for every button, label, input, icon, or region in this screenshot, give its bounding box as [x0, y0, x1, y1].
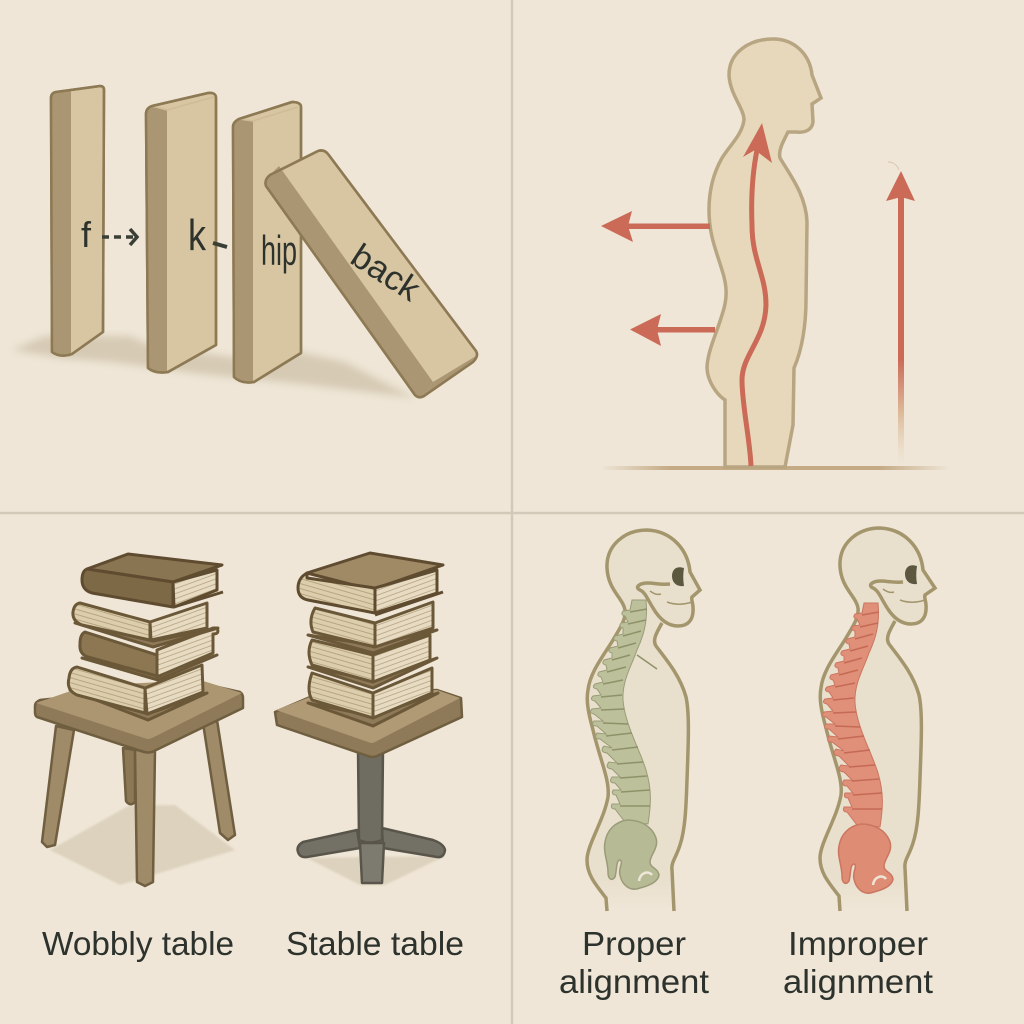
domino: hip	[233, 102, 301, 382]
domino labels: hip	[261, 227, 297, 274]
front leg	[135, 750, 155, 886]
body fill	[820, 528, 933, 910]
dash: knee to hip	[213, 243, 227, 247]
label: proper alignment: alignment	[559, 963, 709, 1000]
domino shadows	[12, 336, 415, 398]
pedestal base	[298, 828, 445, 883]
skull details	[883, 565, 925, 602]
left leg	[42, 726, 74, 847]
label: proper alignment	[559, 925, 709, 1000]
tabletop	[275, 690, 462, 757]
body outline	[587, 530, 700, 911]
domino labels: back	[344, 237, 428, 309]
domino: knee	[146, 93, 216, 372]
book 2	[308, 602, 437, 653]
domino labels: k	[188, 211, 207, 260]
label: proper alignment: Proper	[582, 925, 686, 962]
domino labels	[81, 211, 428, 309]
book 1	[298, 553, 443, 615]
spine	[590, 600, 657, 824]
panel: stable table	[275, 553, 462, 885]
spine arrowhead	[743, 123, 772, 163]
body fill	[587, 530, 700, 910]
arrow: upper left	[601, 211, 710, 242]
panel: proper alignment skeleton	[587, 530, 700, 911]
arrow: vertical plumb line	[886, 162, 915, 466]
book 2	[73, 603, 218, 647]
arrow: lower left	[630, 314, 715, 346]
domino: back	[266, 150, 477, 397]
tabletop	[35, 680, 243, 752]
label: stable table: Stable table	[286, 925, 464, 962]
pelvis	[605, 820, 659, 889]
book 3	[308, 635, 437, 688]
book 1	[82, 554, 223, 607]
panel: standing posture	[600, 39, 950, 470]
right leg	[203, 720, 235, 840]
book 4	[308, 668, 438, 726]
domino labels: f	[81, 214, 92, 255]
pelvis	[839, 824, 893, 893]
book 3	[80, 628, 218, 680]
label: improper alignment: alignment	[783, 963, 933, 1000]
body outline	[820, 528, 935, 911]
back leg	[123, 748, 135, 804]
panel: wobbly table	[35, 554, 243, 886]
curved spine arrow	[742, 150, 766, 466]
domino: foot	[51, 86, 104, 356]
label: wobbly table: Wobbly table	[42, 925, 234, 962]
body silhouette	[707, 39, 821, 467]
dashed arrow: foot to knee	[102, 229, 137, 245]
skull details	[650, 567, 692, 604]
table shadow	[307, 856, 445, 885]
panel: improper alignment skeleton	[820, 528, 935, 911]
book 4	[68, 665, 207, 720]
spine	[822, 603, 882, 827]
floor line	[600, 466, 950, 470]
panel: domino chain	[12, 86, 477, 398]
pedestal column	[358, 750, 383, 842]
table shadow	[50, 805, 235, 885]
label: improper alignment: Improper	[788, 925, 928, 962]
label: improper alignment	[783, 925, 933, 1000]
